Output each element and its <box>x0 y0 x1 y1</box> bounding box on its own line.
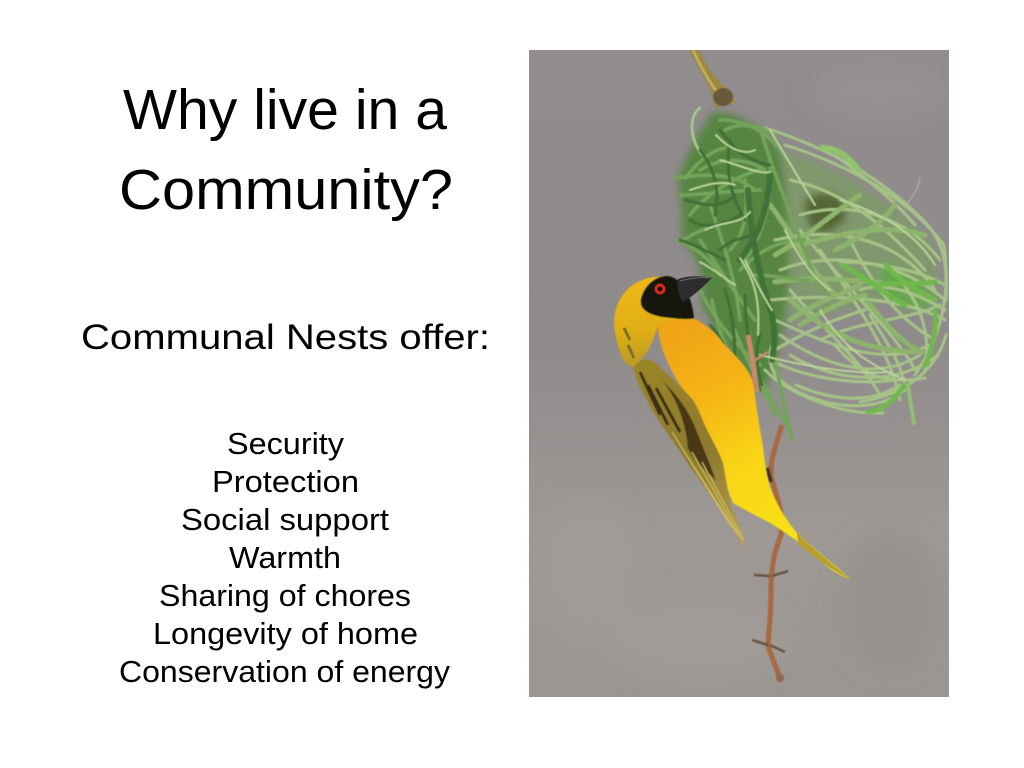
list of benefits: Warmth <box>229 540 341 575</box>
bird <box>614 276 850 579</box>
bird: head and neck <box>614 277 690 367</box>
twig: top branch <box>689 50 736 108</box>
title: Community? <box>119 158 453 222</box>
twig: lower thorn branch <box>752 425 788 682</box>
nest: stray strand <box>908 178 920 203</box>
bird: wing <box>633 359 746 547</box>
bird: black mask <box>641 276 694 319</box>
bird: eye <box>654 284 666 294</box>
photo background <box>529 50 950 697</box>
list of benefits: Longevity of home <box>153 616 418 651</box>
title: Why live in a <box>123 78 447 142</box>
nest: dense left strands <box>675 120 820 440</box>
list of benefits: Sharing of chores <box>159 578 411 613</box>
bird: beak <box>678 276 712 302</box>
nest <box>675 108 947 440</box>
bird: foot <box>745 334 769 392</box>
list of benefits <box>119 426 451 689</box>
photo: weaver bird on nest <box>529 50 950 697</box>
title <box>119 78 453 222</box>
list of benefits: Conservation of energy <box>119 654 451 689</box>
nest: outer sage loops <box>765 128 947 413</box>
list of benefits: Protection <box>212 464 359 499</box>
nest: soft backing foliage <box>678 112 938 392</box>
subheading: Communal Nests offer: <box>81 318 490 357</box>
nest: bold ribbons <box>770 195 925 352</box>
list of benefits: Security <box>227 426 345 461</box>
list of benefits: Social support <box>181 502 389 537</box>
bird: body and tail <box>658 317 850 579</box>
